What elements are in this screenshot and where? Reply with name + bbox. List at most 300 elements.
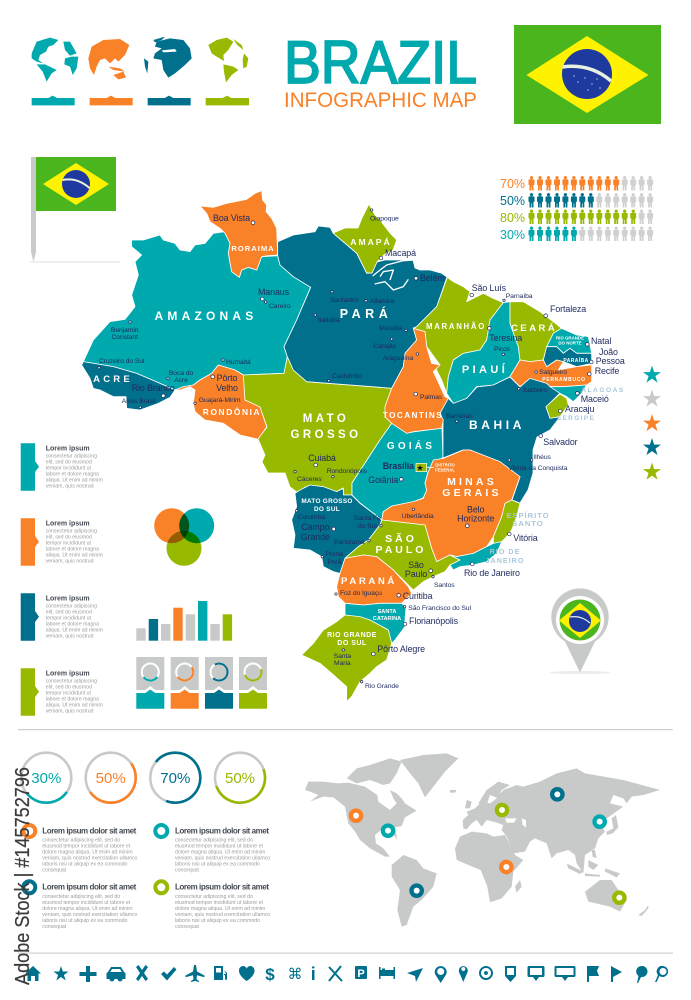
- state: Pernambuco: [510, 360, 592, 387]
- city: Santa Maria: Maria: [334, 660, 351, 667]
- state: Maranhão: [413, 277, 503, 393]
- panel: green note: consectetur adipiscing: [46, 678, 97, 684]
- globe: green: [208, 38, 248, 82]
- marker: blue South America: [411, 885, 422, 896]
- text block: blue: laboris nisi ut aliquip ex ea commodo: [42, 918, 127, 924]
- city: Salvador: [539, 434, 578, 447]
- text block: teal: veniam, quis nostrud exercitation ullamco: [175, 856, 270, 862]
- panel: teal note: tempor incididunt ut: [46, 466, 92, 472]
- city: Juazeiro: Juazeiro: [522, 387, 547, 394]
- row 50%: [500, 193, 653, 208]
- marker: teal North America: [383, 825, 393, 836]
- state: Rio de Janeiro: [450, 542, 502, 570]
- row 70%: [500, 176, 653, 191]
- text block: orange: laboris nisi ut aliquip ex ea commodo: [42, 862, 127, 868]
- panel: blue note: consectetur adipiscing: [46, 604, 97, 610]
- icon: pin 1: [435, 966, 447, 983]
- label: Santa Catarina: CATARINA: [373, 616, 401, 622]
- city: João Pessoa: Pessoa: [596, 356, 625, 366]
- label: Mato Grosso do Sul: DO SUL: [314, 506, 340, 513]
- panel: orange note: aliqua. Ut enim ad minim: [46, 552, 103, 558]
- text block: orange: consequat: [42, 868, 67, 874]
- state: Mato Grosso do Sul: [292, 485, 382, 573]
- panel: green note: aliqua. Ut enim ad minim: [46, 702, 103, 708]
- icon: speech bubble: [528, 966, 544, 981]
- city: São Paulo: [405, 560, 433, 579]
- icon: check: [161, 967, 176, 980]
- label: Paraíba: PARAÍBA: [563, 356, 589, 364]
- city: Oiapoque: [370, 209, 399, 222]
- label: Roraima: RORAIMA: [231, 244, 275, 253]
- city: Vitória da Conquista: Vitória da Conquista: [508, 465, 568, 472]
- text block: orange: Lorem ipsum dolor sit amet: [42, 826, 137, 835]
- city: Belo Horizonte: [457, 504, 494, 528]
- city: Campo Grande: Grande: [301, 532, 330, 542]
- state: Acre: [82, 362, 175, 410]
- text block: green: dolore magna aliqua. Ut enim ad minim: [175, 906, 265, 912]
- city labels: [98, 209, 625, 690]
- panel: green note: Lorem ipsum: [46, 670, 90, 678]
- text block: green: [155, 881, 270, 930]
- city: São Paulo: São: [408, 560, 424, 570]
- side text panels: [21, 443, 103, 716]
- city: Santa Fe do Sul: do Sul: [358, 523, 377, 530]
- people chart: [500, 176, 653, 242]
- globe: teal: [32, 38, 78, 82]
- icon: dollar: $: [265, 965, 275, 984]
- label: Mato Grosso: MATO: [303, 413, 349, 425]
- city: Cáceres: [294, 470, 322, 483]
- star legend: [643, 366, 661, 480]
- city: Santa Maria: [334, 649, 351, 667]
- city: Natal: Natal: [591, 336, 611, 346]
- panel: orange note: tempor incididunt ut: [46, 540, 92, 546]
- text block: teal: consectetur adipiscing elit, sed do: [175, 838, 253, 844]
- city: Santarém: [330, 290, 359, 304]
- label: Rio de Janeiro: JANEIRO: [486, 556, 524, 565]
- panel: orange note: consectetur adipiscing: [46, 528, 97, 534]
- city: Rio de Janeiro: [464, 562, 520, 578]
- city: Benjamin Constant: Benjamin: [111, 327, 139, 334]
- text block: green: Lorem ipsum dolor sit amet: [175, 883, 269, 892]
- Africa: [455, 832, 523, 902]
- city: Palmas: [414, 392, 443, 401]
- icon: round pin: [636, 966, 648, 983]
- label: Bahia: BAHIA: [469, 418, 525, 432]
- ring: 50% green: 50%: [225, 770, 255, 787]
- panel: orange note: veniam, quis nostrud: [46, 558, 94, 564]
- city: Marabá: Maraba: [379, 325, 402, 332]
- Black Sea and Caspian: [505, 818, 526, 827]
- icon: plus: [80, 966, 96, 982]
- city: Cáceres: Cáceres: [297, 476, 322, 483]
- state: Rondônia: [175, 365, 267, 439]
- label: Goiás: GOIÁS: [387, 439, 435, 452]
- label: São Paulo: PAULO: [376, 544, 426, 556]
- city: Boca do Acre: Acre: [174, 377, 188, 384]
- city: Rio Grande: Rio Grande: [365, 683, 399, 690]
- card: teal: [136, 657, 164, 709]
- bar chart: [136, 601, 232, 641]
- row 80%: [500, 210, 653, 225]
- city: Boa Vista: Boa Vista: [213, 213, 250, 223]
- city: Vitória: Vitória: [513, 533, 538, 543]
- star: green: [643, 462, 661, 480]
- text block: orange: consectetur adipiscing elit, sed do: [42, 838, 120, 844]
- panel: green note: tempor incididunt ut: [46, 690, 92, 696]
- city: Rondonópolis: Rondonópolis: [327, 468, 368, 475]
- text block: green: eiusmod tempor incididunt ut labore et: [175, 900, 264, 906]
- star: blue: [643, 438, 661, 455]
- city: Belém: Belém: [420, 273, 445, 283]
- icon: target: [479, 966, 493, 980]
- panel: blue note: labore et dolore magna: [46, 622, 99, 628]
- row 30%: [500, 226, 653, 242]
- map of Brazil: [82, 191, 625, 702]
- percentage rings: [11, 743, 272, 813]
- marker: teal East Asia: [594, 816, 605, 827]
- star: gray: [643, 390, 661, 407]
- row 30%: 30%: [500, 228, 525, 242]
- city: Pôrto Velho: Velho: [216, 383, 238, 393]
- city: Ponta Porã: [321, 551, 343, 566]
- city: Pôrto Velho: Pôrto: [217, 373, 238, 383]
- city: Vitória da Conquista: [508, 459, 568, 472]
- state: Pará: [278, 226, 447, 388]
- city: Rio de Janeiro: Rio de Janeiro: [464, 568, 520, 578]
- panel: orange note: labore et dolore magna: [46, 546, 99, 552]
- text block: teal: eiusmod tempor incididunt ut labore et: [175, 844, 264, 850]
- city: São Luís: [470, 283, 507, 297]
- world map: [305, 753, 660, 927]
- subtitle: INFOGRAPHIC MAP: [284, 89, 477, 112]
- vertical stock watermark: Adobe Stock | #145752796: [12, 767, 34, 985]
- city: Ponta Porã: Ponta: [326, 551, 343, 558]
- city: Araguaína: [383, 353, 418, 362]
- states: central and north: [243, 204, 560, 520]
- city: Pôrto Velho: [211, 373, 238, 393]
- panel: green note: veniam, quis nostrud: [46, 708, 94, 714]
- city: Boca do Acre: Boca do: [169, 370, 193, 377]
- city: Curitiba: Curitiba: [403, 591, 433, 601]
- city: São Luís: São Luís: [472, 283, 507, 293]
- star: teal: [643, 366, 661, 383]
- panel: blue note: elit, sed do eiusmod: [46, 610, 92, 616]
- label: Mato Grosso do Sul: [301, 498, 353, 513]
- text block: blue: consectetur adipiscing elit, sed do: [42, 894, 120, 900]
- city: Carajás: Carajás: [373, 343, 397, 350]
- city: Careiro: Careiro: [269, 303, 291, 310]
- map pin with flag: [550, 588, 610, 674]
- city: Benjamin Constant: [111, 321, 139, 341]
- state: Espírito Santo: [493, 500, 520, 543]
- marker: orange North America: [351, 810, 361, 821]
- state: Sergipe: [546, 394, 568, 418]
- icon: star: [53, 966, 69, 980]
- label: Rio Grande do Norte: [556, 336, 584, 346]
- row 70%: 70%: [500, 177, 525, 191]
- South America: [392, 855, 437, 927]
- Indonesia and Japan: [567, 815, 620, 877]
- city: Santarém: Santarém: [330, 297, 359, 304]
- city: Careiro: [264, 301, 291, 310]
- city: Santos: [432, 576, 455, 589]
- city: Maceió: Maceió: [581, 394, 609, 404]
- city: Fortaleza: Fortaleza: [550, 304, 586, 314]
- venn diagram: [154, 508, 214, 566]
- city: Salvador: Salvador: [543, 437, 578, 447]
- label: Rio de Janeiro: [486, 547, 524, 565]
- label: Espírito Santo: ESPÍRITO: [506, 511, 550, 520]
- label: Acre: ACRE: [93, 374, 133, 385]
- panel: blue note: [21, 593, 103, 641]
- flag on pole: [30, 157, 120, 263]
- Madagascar: [515, 880, 522, 893]
- city: Cruzeiro do Sul: Cruzeiro do Sul: [99, 358, 145, 365]
- city: João Pessoa: [590, 347, 625, 366]
- Eurasia: [463, 768, 660, 873]
- city: Guajará-Mirim: Guajará-Mirim: [199, 397, 241, 404]
- label: Pará: PARÁ: [340, 306, 392, 321]
- city: Belo Horizonte: Horizonte: [457, 514, 494, 524]
- card: blue: [205, 657, 233, 709]
- city: Itaituba: [314, 314, 340, 324]
- state: Minas Gerais: [382, 450, 520, 562]
- state: Roraima: [200, 191, 278, 277]
- city: Foz do Iguaçu: Foz do Iguaçu: [340, 590, 382, 597]
- text block: orange: dolore magna aliqua. Ut enim ad minim: [42, 850, 133, 856]
- text block: blue: Lorem ipsum dolor sit amet: [42, 883, 137, 892]
- city: Aracaju: Aracaju: [565, 404, 595, 414]
- icon: plane: [186, 965, 204, 982]
- panel: teal note: Lorem ipsum: [46, 446, 90, 452]
- label: Amazonas: AMAZONAS: [155, 309, 257, 323]
- Britain and Iceland: [450, 790, 472, 808]
- label: Rio de Janeiro: RIO DE: [490, 547, 520, 556]
- panel: orange note: [21, 518, 103, 566]
- label: Minas Gerais: MINAS: [447, 476, 497, 488]
- icon: wide speech bubble: [554, 966, 576, 981]
- label: Rondônia: RONDÔNIA: [203, 406, 261, 417]
- progress cards: [136, 657, 267, 709]
- label: Pernambuco: PERNAMBUCO: [542, 377, 586, 383]
- icon: command: ⌘: [288, 965, 302, 983]
- icon: home: [25, 966, 41, 981]
- panel: teal note: elit, sed do eiusmod: [46, 460, 92, 466]
- states: west region: [82, 191, 311, 439]
- state: Goiás: [352, 423, 443, 520]
- city: Parnaíba: Parnaíba: [506, 293, 533, 300]
- panel: blue note: veniam, quis nostrud: [46, 634, 94, 640]
- city: Corumbá: [296, 510, 325, 521]
- city: Benjamin Constant: Constant: [111, 334, 138, 341]
- text block: orange: eiusmod tempor incididunt ut labore et: [42, 844, 131, 850]
- city: Itaituba: Itaituba: [318, 317, 340, 324]
- city: Belo Horizonte: Belo: [467, 504, 485, 514]
- text block: blue: dolore magna aliqua. Ut enim ad minim: [42, 906, 133, 912]
- globes row: [32, 37, 249, 105]
- label: Mato Grosso: GROSSO: [291, 429, 361, 441]
- icon: heart: [239, 966, 255, 981]
- ring: 50% green: [208, 746, 272, 810]
- globe: orange: [88, 39, 129, 79]
- row 80%: 80%: [500, 211, 525, 225]
- star: orange: [643, 414, 661, 431]
- text block: green: veniam, quis nostrud exercitation ullamco: [175, 912, 270, 918]
- label: São Paulo: [376, 532, 426, 556]
- globe bar: green: [206, 96, 249, 105]
- text block: teal: laboris nisi ut aliquip ex ea commodo: [175, 862, 260, 868]
- city: Manaus: Manaus: [258, 287, 290, 297]
- text block: orange: veniam, quis nostrud exercitation ullamco: [42, 856, 138, 862]
- globe bar: blue: [148, 96, 191, 105]
- panel: green note: labore et dolore magna: [46, 696, 99, 702]
- text block: teal: Lorem ipsum dolor sit amet: [175, 826, 269, 835]
- text block: green: laboris nisi ut aliquip ex ea commodo: [175, 918, 260, 924]
- marker: orange Africa: [501, 862, 511, 872]
- city: Santa Fe do Sul: [354, 515, 382, 530]
- state: Alagoas: [550, 385, 587, 402]
- text block: teal: [155, 825, 270, 874]
- state name labels: [93, 237, 625, 647]
- label: Alagoas: ALAGOAS: [581, 387, 625, 394]
- city: Boca do Acre: [167, 370, 193, 384]
- city: Altamira: Altamira: [370, 298, 394, 305]
- label: Distrito Federal: DISTRITO: [435, 462, 455, 468]
- state: Amapá: [333, 204, 397, 273]
- city: Cachimbo: Cachimbo: [332, 373, 362, 380]
- icon: magnifier: [655, 966, 668, 982]
- panel: teal note: [21, 443, 103, 491]
- label: Distrito Federal: [435, 462, 455, 472]
- icon: flag: [587, 966, 599, 982]
- globe bar: orange: [90, 96, 133, 105]
- ring: 70%: [140, 743, 210, 813]
- city: Barreiras: Barreiras: [446, 413, 473, 420]
- ring: 30%: [11, 743, 81, 813]
- state: Paraná: [337, 555, 412, 605]
- ring: 30%: 30%: [31, 770, 61, 787]
- label: Rio Grande do Sul: [327, 632, 377, 647]
- city: Pôrto Alegre: Pôrto Alegre: [377, 644, 425, 654]
- city: Santos: Santos: [434, 582, 455, 589]
- Scandinavia: [478, 782, 510, 805]
- city: Corumbá: Corumbá: [298, 514, 325, 521]
- Arctic islands: [347, 758, 402, 785]
- city: Rio Branco: Rio Branco: [132, 383, 175, 393]
- city: Cachimbo: [328, 373, 362, 382]
- city: Uberlândia: [402, 508, 434, 520]
- text block: teal: consequat: [175, 868, 199, 874]
- label: Mato Grosso: [291, 413, 361, 441]
- text block: blue: [23, 881, 138, 930]
- panel: teal note: labore et dolore magna: [46, 472, 99, 478]
- city: Rio Grande: [360, 680, 399, 690]
- state: São Paulo: [345, 520, 460, 590]
- city: Uberlândia: Uberlândia: [402, 513, 434, 520]
- city: Ilhéus: Ilhéus: [533, 454, 552, 461]
- text block: green: consequat: [175, 924, 199, 930]
- city: Assis Brasil: [122, 398, 156, 408]
- states: northeast: [373, 260, 592, 433]
- icon: fuel: [214, 966, 227, 980]
- North America: [305, 782, 417, 857]
- globe: blue: [144, 37, 192, 78]
- label: São Paulo: SÃO: [385, 532, 417, 545]
- label: Santa Catarina: [373, 609, 401, 622]
- Greenland: [400, 753, 458, 797]
- icon: info: i: [311, 964, 316, 984]
- label: Espírito Santo: SANTO: [512, 519, 544, 528]
- icon: fork and knife: [329, 966, 342, 981]
- label: Minas Gerais: [442, 476, 502, 499]
- city: Oiapoque: Oiapoque: [370, 216, 399, 222]
- states: south and southeast: [292, 450, 520, 702]
- city: João Pessoa: João: [599, 347, 618, 357]
- icon: navigation: [407, 968, 423, 982]
- city: Araguaína: Araguaína: [383, 355, 413, 362]
- icon: parking: P: [357, 968, 365, 980]
- icon: parking: [355, 966, 367, 980]
- panel: green note: [21, 668, 103, 716]
- text block: green: consectetur adipiscing elit, sed do: [175, 894, 253, 900]
- city: Carajás: [373, 338, 397, 350]
- Distrito Federal callout: [416, 463, 434, 472]
- panel: teal note: aliqua. Ut enim ad minim: [46, 478, 103, 484]
- panel: blue note: tempor incididunt ut: [46, 616, 92, 622]
- river channels: [373, 260, 414, 290]
- state: Piauí: [447, 302, 520, 403]
- label: Rio Grande do Norte: DO NORTE: [558, 340, 582, 346]
- city: Humaitá: Humaitá: [226, 359, 251, 366]
- text block: blue: consequat: [42, 924, 67, 930]
- city: Brasília: Brasília: [383, 461, 414, 471]
- city: Campo Grande: Campo: [301, 522, 330, 532]
- city: São Francisco do Sul: São Francisco do Sul: [408, 605, 471, 612]
- Australia: [585, 880, 627, 912]
- city: Assis Brasil: Assis Brasil: [122, 398, 156, 405]
- label: Piauí: PIAUÍ: [462, 363, 508, 376]
- label: Espírito Santo: [506, 511, 550, 528]
- text block: blue: eiusmod tempor incididunt ut labore et: [42, 900, 131, 906]
- city: Santa Maria: Santa: [334, 653, 351, 660]
- label: Ceará: CEARÁ: [511, 322, 557, 334]
- state: Rio Grande do Sul: [302, 615, 392, 702]
- label: Minas Gerais: GERAIS: [442, 487, 502, 499]
- icon row: [25, 964, 668, 984]
- ring: 70%: 70%: [160, 770, 190, 787]
- label: Rio Grande do Sul: RIO GRANDE: [327, 632, 377, 639]
- city: Macapá: Macapá: [385, 248, 416, 258]
- city: São Paulo: Paulo: [405, 569, 427, 579]
- label: Sergipe: SERGIPE: [557, 415, 595, 422]
- marker: green Europe: [497, 805, 507, 815]
- text block: orange: [23, 825, 138, 874]
- ring: 50%: [76, 743, 146, 813]
- icon: speech marker: [505, 966, 516, 982]
- city: Palmas: Palmas: [420, 394, 443, 401]
- panel: blue note: aliqua. Ut enim ad minim: [46, 628, 103, 634]
- icon: pin 2: [459, 966, 468, 982]
- icon: pennant: [611, 966, 622, 982]
- card: orange: [171, 657, 199, 709]
- flag: Brazil large: [514, 25, 661, 124]
- label: Santa Catarina: SANTA: [378, 609, 396, 615]
- row 50%: 50%: [500, 194, 525, 208]
- label: Paraná: PARANÁ: [341, 575, 397, 587]
- city: Fortaleza: [544, 304, 586, 318]
- globe bar: teal: [32, 96, 75, 105]
